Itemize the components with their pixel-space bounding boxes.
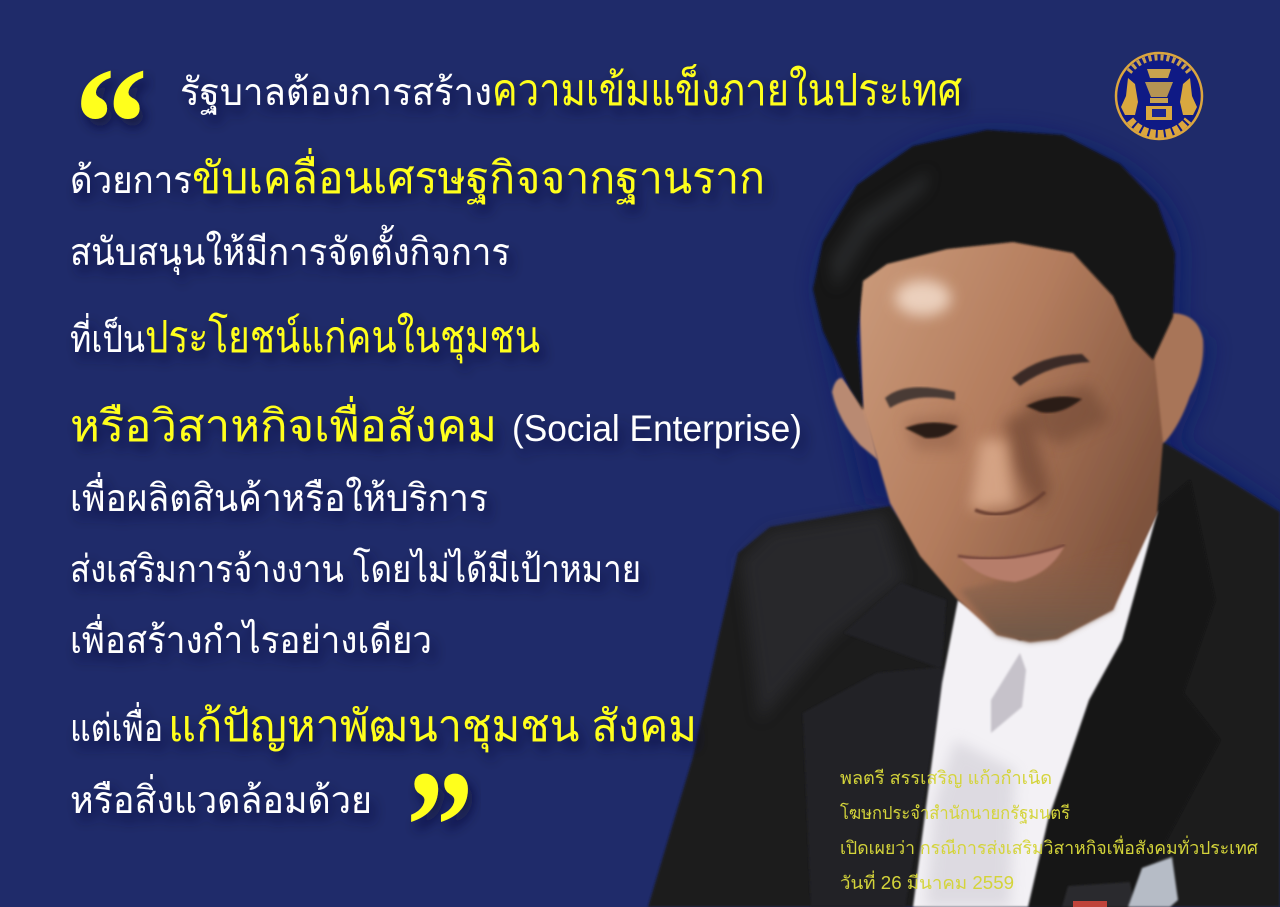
line 1: ความเข้มแข็งภายในประเทศ — [492, 64, 962, 115]
pocket — [1062, 882, 1135, 907]
caption: attribution — [840, 768, 1259, 893]
logo: government seal — [1116, 53, 1202, 139]
line 2: ด้วยการ — [70, 160, 192, 202]
badge strip — [1073, 901, 1107, 907]
figure glow — [819, 134, 1280, 564]
hair — [813, 130, 1175, 410]
line 10: หรือสิ่งแวดล้อมด้วย — [70, 774, 372, 822]
eyes — [905, 422, 958, 438]
mouth — [958, 545, 1065, 582]
line 5 — [70, 395, 802, 451]
chin shadow — [960, 540, 1130, 642]
eyebrows — [885, 387, 955, 408]
line 3: สนับสนุนให้มีการจัดตั้งกิจการ — [70, 224, 510, 275]
collar fold — [991, 653, 1026, 733]
caption: attribution: โฆษกประจำสำนักนายกรัฐมนตรี — [840, 802, 1070, 824]
line 5: (Social Enterprise) — [512, 408, 802, 449]
line 2: ขับเคลื่อนเศรษฐกิจจากฐานราก — [192, 147, 765, 204]
suit jacket — [648, 442, 1280, 907]
line 8: เพื่อสร้างกำไรอย่างเดียว — [70, 614, 432, 662]
line 2 — [70, 147, 765, 204]
hair sheen — [830, 170, 930, 290]
seal urn — [1145, 69, 1173, 103]
caption: attribution: วันที่ 26 มีนาคม 2559 — [840, 870, 1014, 893]
left lapel — [803, 583, 946, 907]
line 1: รัฐบาลต้องการสร้าง — [180, 72, 492, 115]
quote mark: opening: “ — [74, 34, 148, 212]
photo: spokesperson portrait — [648, 130, 1280, 907]
left shoulder sheen — [740, 512, 905, 720]
line 6: เพื่อผลิตสินค้าหรือให้บริการ — [70, 472, 488, 520]
seal pedestal — [1146, 106, 1172, 120]
seal plume arc — [1129, 57, 1189, 72]
line 1 — [180, 64, 962, 115]
line 9: แก้ปัญหาพัฒนาชุมชน สังคม — [168, 702, 697, 753]
line 4: ที่เป็น — [70, 313, 145, 361]
caption: attribution: พลตรี สรรเสริญ แก้วกำเนิด — [840, 768, 1052, 788]
line 9: แต่เพื่อ — [70, 702, 163, 750]
shirt shading — [925, 740, 1015, 907]
face — [857, 235, 1163, 642]
line 7: ส่งเสริมการจ้างงาน โดยไม่ได้มีเป้าหมาย — [70, 547, 641, 591]
seal bottom band — [1130, 120, 1188, 134]
caption: attribution: เปิดเผยว่า กรณีการส่งเสริมวิสาหกิจเพื่อสังคมทั่วประเทศ — [840, 835, 1259, 858]
nose underside — [975, 492, 1045, 514]
line 4 — [70, 312, 540, 364]
line 4: ประโยชน์แก่คนในชุมชน — [145, 312, 540, 364]
nose shadow — [1005, 410, 1050, 510]
forehead highlight — [895, 280, 951, 316]
eye sockets — [1025, 385, 1110, 445]
seal lions — [1121, 78, 1197, 115]
nose highlight — [970, 440, 1015, 510]
pin — [1128, 857, 1178, 907]
right lapel — [1028, 480, 1220, 907]
shirt — [913, 510, 1158, 907]
ears — [832, 313, 1203, 460]
line 5: หรือวิสาหกิจเพื่อสังคม — [70, 395, 497, 451]
